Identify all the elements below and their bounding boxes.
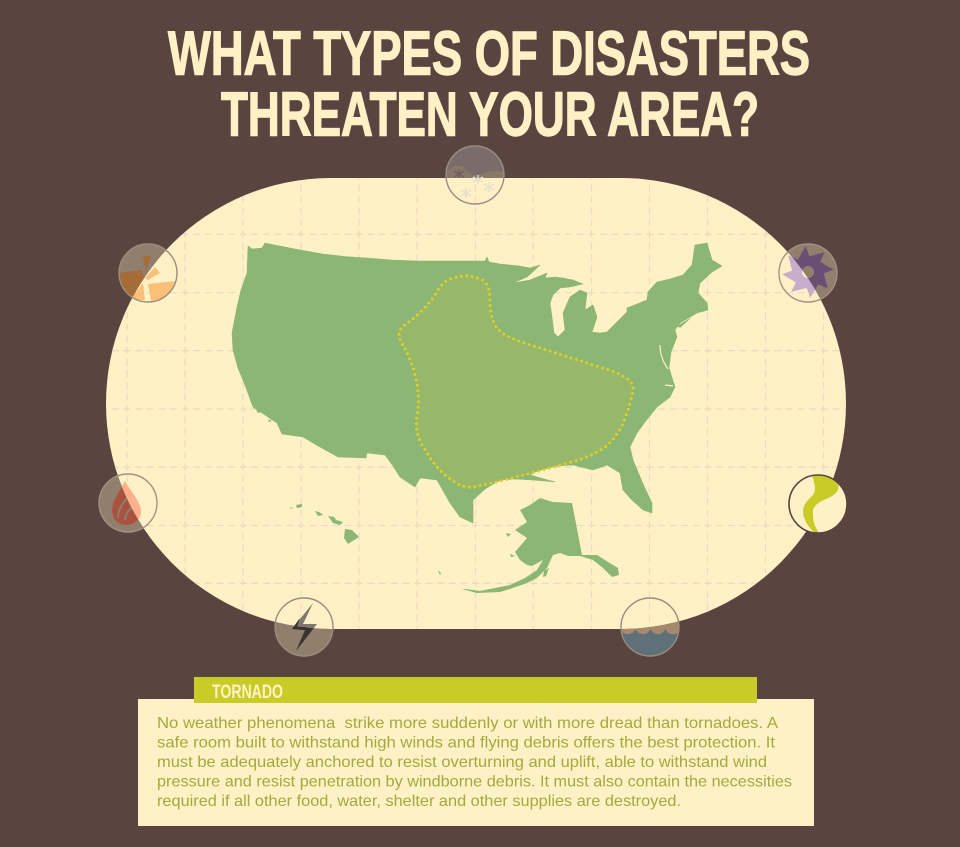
map: Hawaii bbox=[290, 504, 359, 544]
icon: blizzard bbox=[446, 146, 504, 198]
description text: required if all other food, water, shelter and other supplies are destroyed. bbox=[157, 793, 681, 810]
icon: storm surge waves bbox=[620, 598, 681, 657]
icon: lightning bbox=[275, 598, 333, 656]
detail: Long Island and Channel Islands bbox=[256, 317, 692, 422]
panel: tornado description bbox=[138, 677, 814, 826]
icon: hurricane bbox=[779, 244, 837, 302]
description text: safe room built to withstand high winds and flying debris offers the best protection. It bbox=[157, 734, 776, 752]
description text: must be adequately anchored to resist overturning and uplift, able to withstand wind bbox=[157, 754, 767, 771]
description box bbox=[138, 699, 814, 826]
high risk tornado zone bbox=[399, 276, 633, 487]
icon: wildfire bbox=[119, 244, 177, 302]
map panel bbox=[106, 178, 846, 629]
icon: flood drop bbox=[99, 474, 157, 532]
icon ring: blizzard bbox=[446, 146, 504, 204]
title bbox=[168, 18, 810, 150]
icon: tornado (selected) bbox=[789, 470, 847, 533]
description text bbox=[157, 715, 792, 810]
description text: pressure and resist penetration by windborne debris. It must also contain the necessities bbox=[157, 774, 792, 790]
description text: No weather phenomena strike more suddenly or with more dread than tornadoes. A bbox=[157, 715, 779, 732]
detail: bays and coast bbox=[660, 345, 673, 386]
map: Alaska bbox=[438, 498, 619, 593]
tornado heading: TORNADO bbox=[212, 681, 283, 703]
tornado header bar bbox=[194, 677, 757, 703]
map: contiguous United States bbox=[232, 243, 722, 523]
